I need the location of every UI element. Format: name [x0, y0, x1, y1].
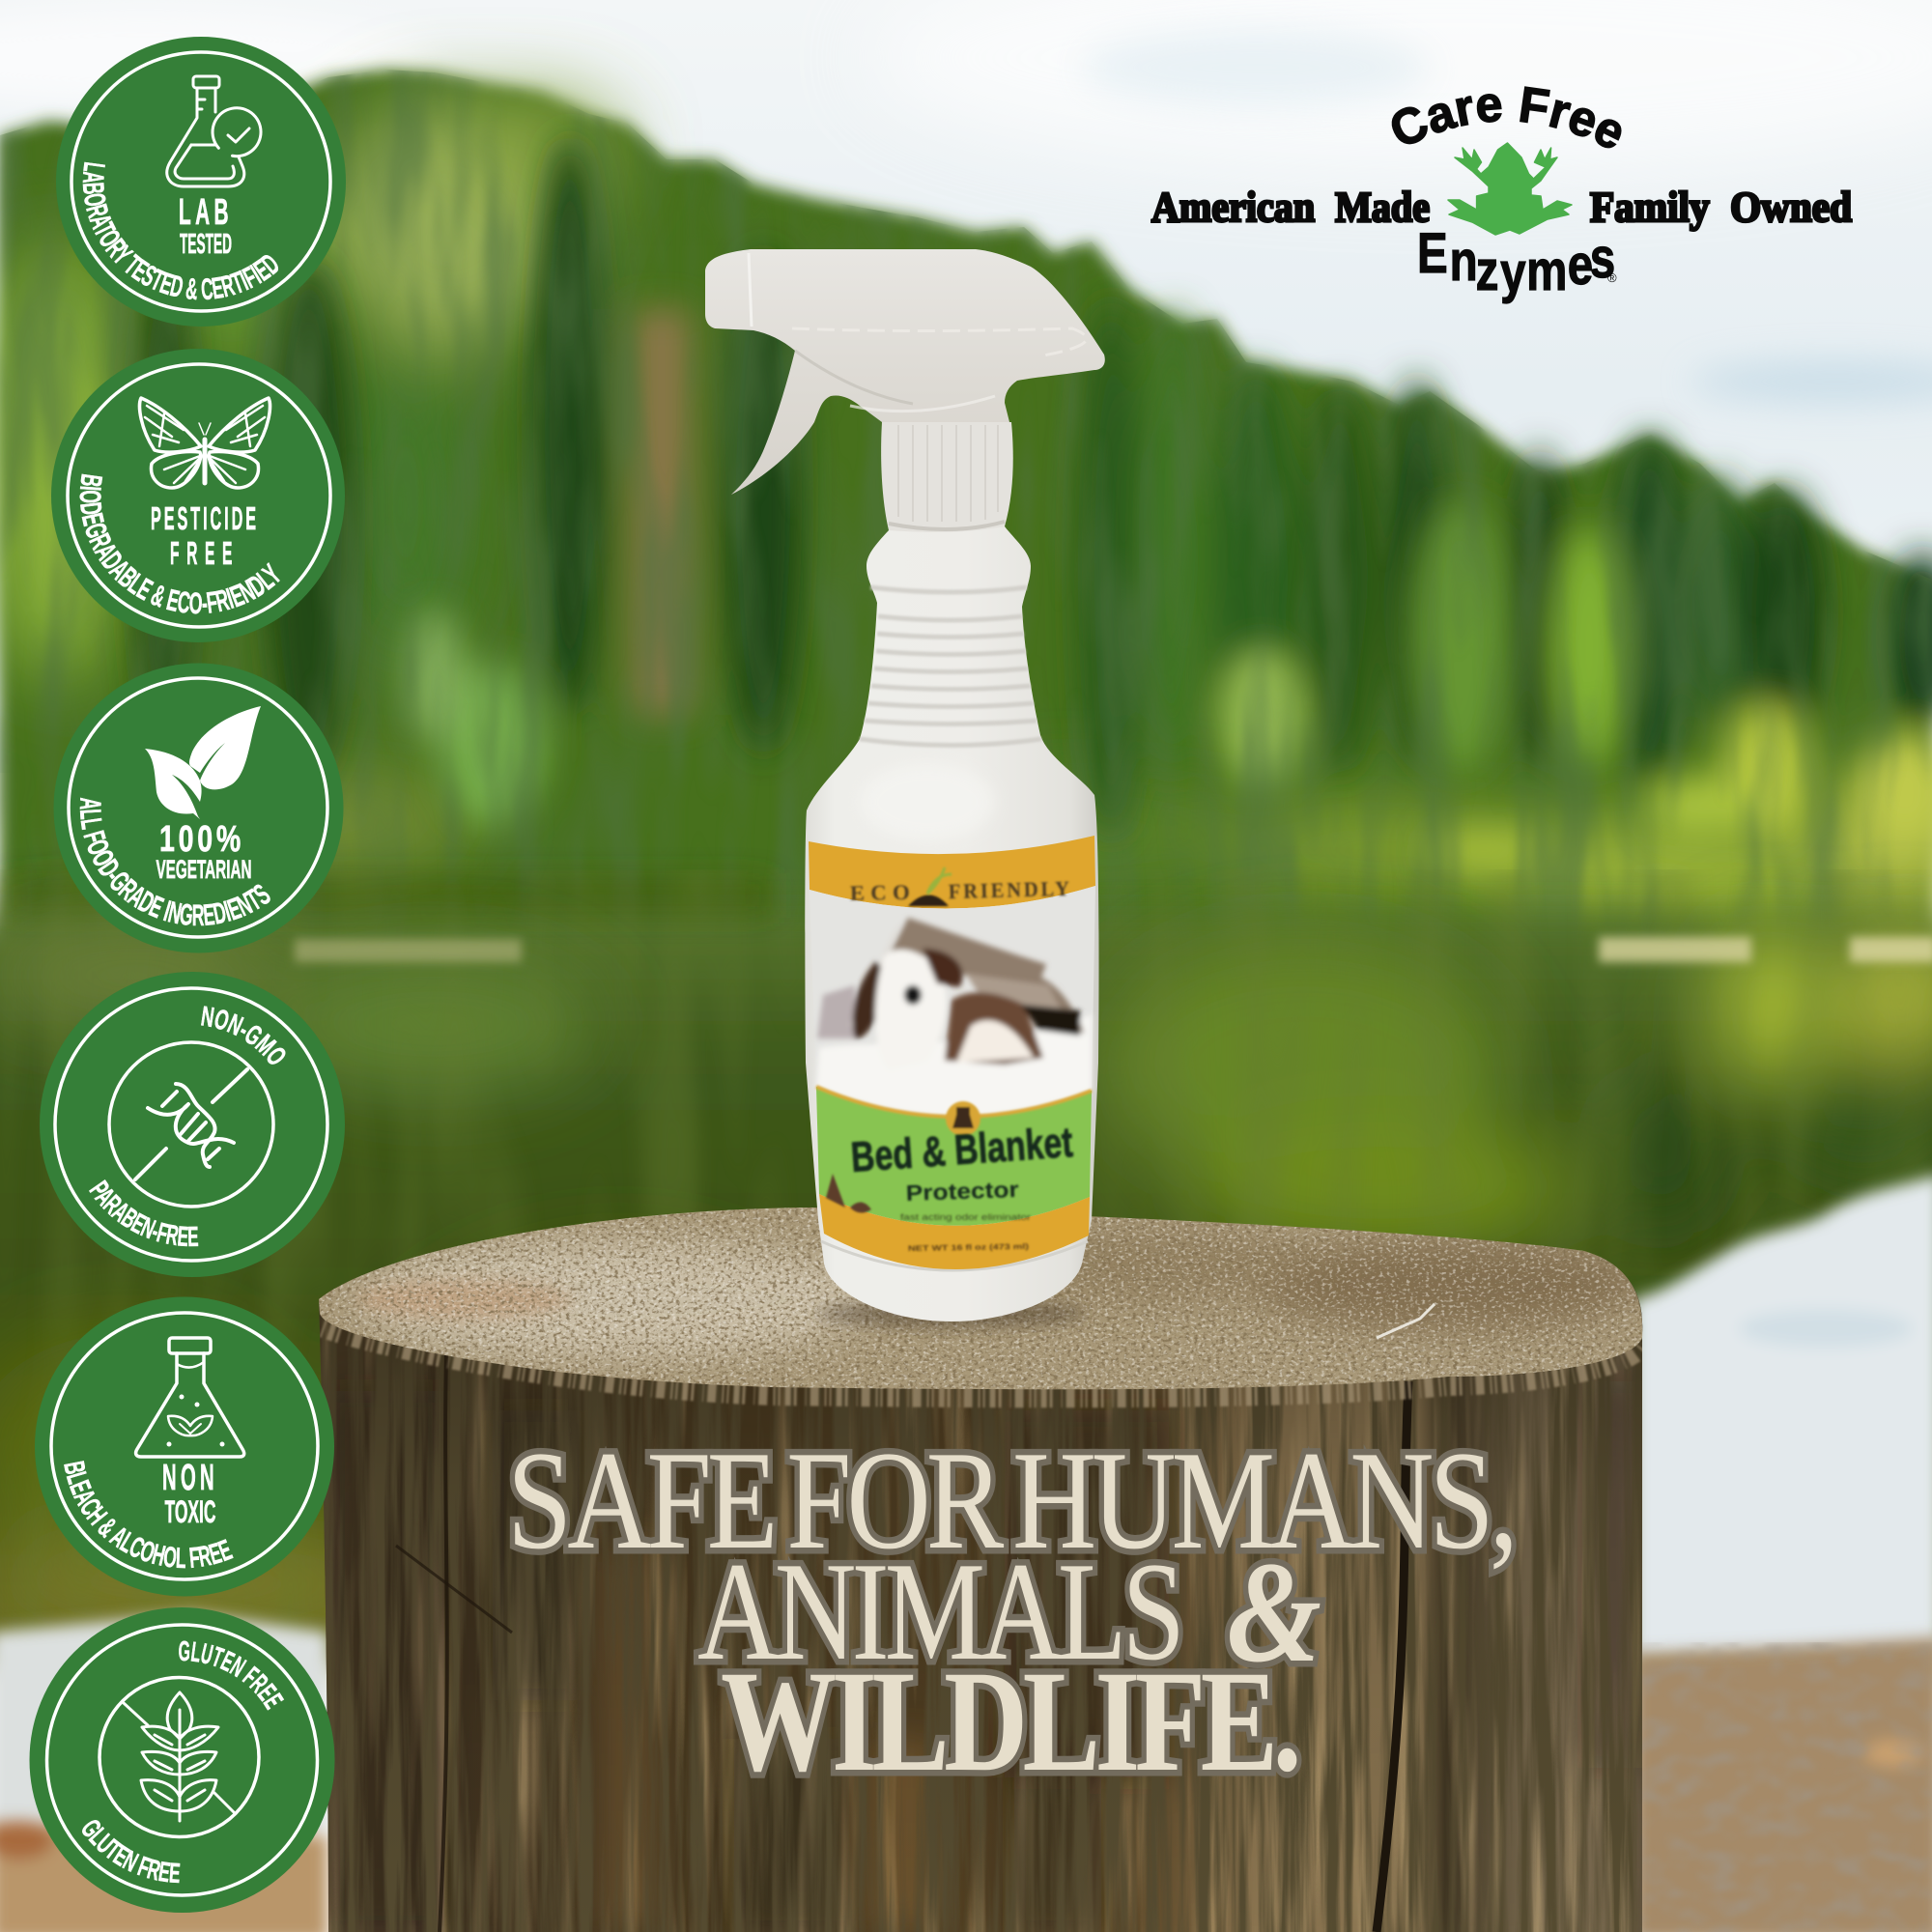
stump top surface — [319, 1208, 1642, 1389]
label photo area — [810, 886, 1095, 1117]
lower base ring — [821, 1241, 1088, 1270]
badge subheading: TOXIC — [164, 1494, 216, 1529]
trigger head — [705, 249, 1105, 495]
headline line 3: WILDLIFE. — [721, 1641, 1296, 1802]
individual conifers — [131, 135, 1932, 867]
sandy ground — [0, 1637, 1932, 1932]
icon: two leaves — [145, 706, 261, 819]
screw collar — [881, 422, 1013, 532]
lake with forest reflection — [0, 884, 1932, 1662]
icon: flask with leaves — [136, 1338, 244, 1457]
badge: 100% vegetarian — [54, 663, 344, 952]
small pet figures on label — [826, 1174, 871, 1213]
badge: pesticide free: PESTICIDE — [151, 500, 259, 536]
badge: pesticide free: FREE — [170, 535, 240, 571]
badge: gluten free — [29, 1607, 334, 1913]
logo text: American Made: American Made — [1151, 184, 1430, 231]
curved caption: LABORATORY TESTED & CERTIFIED — [83, 162, 278, 299]
label text: product name: Protector — [905, 1177, 1019, 1206]
label text: product name: fast acting odor eliminator — [900, 1212, 1031, 1222]
headline line 2: ANIMALS — [697, 1533, 1180, 1690]
headline ampersand: & — [1227, 1532, 1321, 1692]
neck ribs — [860, 587, 1041, 746]
bottle body — [805, 526, 1099, 1321]
icon: lab flask with check — [167, 76, 270, 186]
stump rim fringe — [324, 1325, 1640, 1395]
sky reflection in the water — [0, 1174, 1932, 1835]
flask bubbles — [166, 1395, 224, 1447]
badge: pesticide free — [51, 349, 345, 642]
sky — [0, 0, 1932, 773]
headline line 1: SAFE FOR HUMANS, — [507, 1422, 1514, 1578]
paw badge on label — [946, 1101, 980, 1136]
icon: crossed-out wheat — [124, 1692, 235, 1821]
curved caption: bottom: PARABEN-FREE — [83, 1176, 199, 1253]
logo text: Family Owned: Family Owned — [1590, 184, 1852, 231]
forest hillside — [0, 0, 1932, 966]
badge: lab tested — [56, 37, 346, 327]
badge: non toxic — [35, 1296, 334, 1596]
label green band — [816, 1087, 1092, 1226]
icon: crossed-out DNA helix — [135, 1069, 247, 1179]
curved caption: ALL FOOD-GRADE INGREDIENTS — [79, 798, 270, 925]
stump bark side — [309, 1256, 1662, 1932]
label orange bottom band — [819, 1194, 1090, 1269]
label orange top band — [809, 836, 1095, 909]
curved caption: BIODEGRADABLE & ECO-FRIENDLY — [79, 473, 280, 614]
tree stump — [290, 1188, 1690, 1932]
curved caption: BLEACH & ALCOHOL FREE — [57, 1459, 237, 1575]
label text: product name — [849, 1119, 1074, 1253]
bottle shadow on the stump — [816, 1300, 1087, 1327]
badge heading: 100% — [159, 819, 244, 860]
label text: Eco Friendly: ECO — [850, 880, 916, 905]
badge: non-GMO paraben free — [40, 972, 345, 1277]
product label — [809, 836, 1095, 1269]
label text: Eco Friendly — [850, 867, 1072, 906]
curved caption: top: NON-GMO — [199, 1001, 292, 1071]
logo: Care Free Enzymes — [1151, 76, 1852, 304]
spray bottle product — [705, 249, 1105, 1327]
logo text: Care Free: Care Free — [1391, 86, 1621, 149]
badge subheading: VEGETARIAN — [156, 855, 251, 884]
registered mark: ® — [1607, 270, 1617, 285]
badge heading: LAB — [179, 192, 233, 233]
icon: butterfly — [140, 398, 270, 488]
curved caption: top: GLUTEN FREE — [178, 1636, 289, 1715]
logo icon: green frog — [1448, 143, 1572, 235]
dog and cat photo — [816, 918, 1092, 1117]
badge: lab tested: TESTED — [180, 229, 232, 260]
headline — [507, 1422, 1514, 1802]
label text: product name: NET WT 16 fl oz (473 ml) — [908, 1242, 1029, 1253]
curved caption: bottom: GLUTEN FREE — [74, 1814, 181, 1889]
logo text: Enzymes: Enzymes — [1417, 223, 1615, 304]
badge heading: NON — [162, 1458, 218, 1498]
label text: Eco Friendly: FRIENDLY — [948, 876, 1072, 903]
bottle shoulder highlight — [860, 763, 995, 840]
label text: product name: Bed & Blanket — [849, 1119, 1074, 1181]
